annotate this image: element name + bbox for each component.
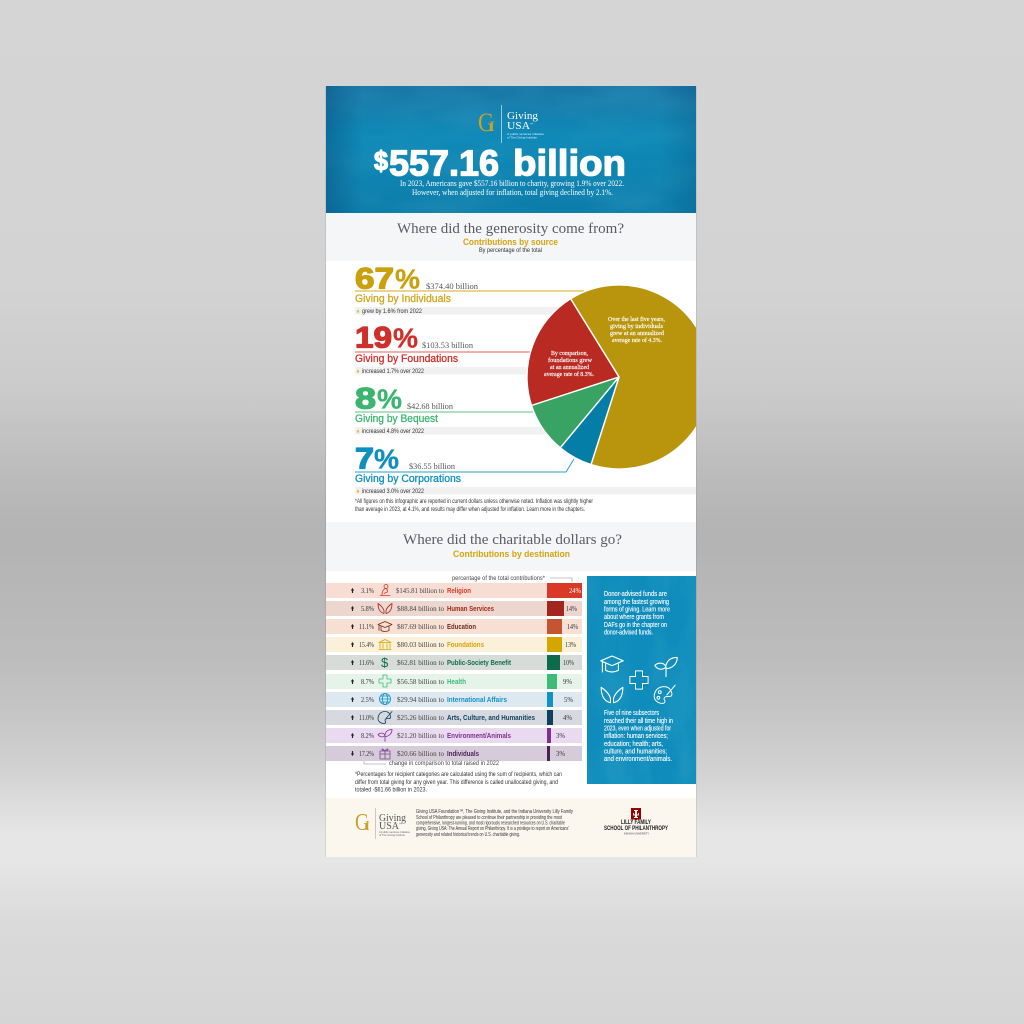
footnote: unallocated giving: *Percentages for recipient categories are calculated using the sum of recipients, which can — [355, 772, 562, 778]
row: environment/animals: $21.20 billion to — [397, 731, 444, 740]
pie callout: individuals — [608, 316, 665, 344]
row: public-society benefit: 11.6% — [359, 658, 374, 667]
row: human services: 5.8% — [361, 604, 374, 613]
row: foundations: $80.03 billion to — [397, 640, 444, 649]
footer logo: Giving USA: USA — [379, 821, 400, 832]
footer statement: generosity and related historical trends on U.S. charitable giving. — [416, 832, 520, 838]
row: arts, culture, and humanities: 4% — [563, 713, 572, 722]
panel text: record subsectors — [604, 710, 673, 763]
panel text: record subsectors: inflation: human services; — [604, 733, 668, 740]
row: religion: 24% — [569, 586, 581, 595]
row: environment/animals: Environment/Animals — [447, 733, 511, 740]
row: foundations: Foundations — [447, 642, 484, 649]
icon: plant leaves — [655, 657, 677, 677]
pie callout: foundations: By comparison, — [551, 350, 588, 357]
panel text: donor-advised funds: Donor-advised funds are — [604, 591, 667, 598]
row: individuals: 17.2% — [359, 749, 374, 758]
header banner — [326, 86, 696, 213]
source: individuals: grew by 1.6% from 2022 — [362, 309, 423, 315]
source: foundations — [355, 322, 530, 375]
source: corporations — [355, 442, 574, 495]
row: arts, culture, and humanities: Arts, Culture, and Humanities — [447, 715, 535, 722]
heading band: destinations: Where did the charitable dollars go? — [403, 532, 622, 548]
row: education: 11.1% — [359, 622, 374, 631]
row: international affairs: $29.94 billion to — [397, 695, 444, 704]
logo: Giving USA: G — [478, 108, 494, 137]
footer logo: Giving USA: Giving — [379, 813, 406, 824]
panel text: record subsectors: culture, and humanities; — [604, 748, 667, 756]
row: health: Health — [447, 679, 466, 686]
source: corporations: 7 — [355, 442, 374, 476]
row: health: 8.7% — [361, 677, 374, 686]
pie callout: individuals: average rate of 4.3%. — [612, 337, 662, 344]
row: health: $56.58 billion to — [397, 677, 444, 686]
source: corporations: $36.55 billion — [409, 461, 456, 471]
footer logo: Giving USA: A public services initiative — [379, 830, 410, 834]
row: arts, culture, and humanities: $25.26 billion to — [397, 713, 444, 722]
row: human services: Human Services — [447, 606, 494, 613]
row: religion: $145.81 billion to — [396, 586, 444, 595]
row: health: 9% — [563, 677, 572, 686]
heading band: sources: By percentage of the total — [479, 248, 542, 254]
headline total: billion — [513, 142, 626, 184]
row: individuals — [326, 746, 582, 761]
icon: artist palette — [654, 685, 675, 703]
row: individuals: $20.66 billion to — [397, 749, 444, 758]
pie callout: foundations — [544, 350, 594, 378]
header summary text: However, when adjusted for inflation, total giving declined by 2.1%. — [412, 188, 613, 197]
footer statement: School of Philanthropy are pleased to continue their partnership in providing the most — [416, 815, 562, 821]
footer logo: Lilly Family School of Philanthropy: SCHOOL OF PHILANTHROPY — [604, 826, 668, 832]
headline total — [374, 142, 626, 184]
heading band: destinations: Contributions by destination — [453, 549, 570, 559]
pie callout: individuals: giving by individuals — [610, 323, 663, 330]
pie callout: foundations: foundations grew — [548, 357, 592, 364]
row: international affairs: 5% — [564, 695, 573, 704]
panel text: record subsectors: Five of nine subsectors — [604, 710, 659, 717]
heading band: destinations — [326, 522, 696, 571]
footer statement — [416, 809, 573, 838]
row: religion: 3.1% — [361, 586, 374, 595]
source: bequest: increased 4.8% over 2022 — [362, 429, 425, 435]
poster page — [325, 86, 711, 857]
logo: Giving USA: of The Giving Institute — [507, 136, 537, 140]
row: arts, culture, and humanities — [326, 710, 582, 725]
source: foundations: $103.53 billion — [422, 340, 474, 350]
row: individuals: 3% — [556, 749, 565, 758]
row: education: 14% — [567, 622, 578, 631]
row: public-society benefit — [326, 655, 582, 670]
panel text: record subsectors: reached their all time high in — [604, 718, 673, 725]
footer statement: giving, Giving USA: The Annual Report on Philanthropy. It is a privilege to report on Americans' — [416, 826, 569, 832]
footer logo: Giving USA: ™ — [399, 822, 402, 826]
footnote: unallocated giving — [355, 772, 562, 794]
footnote: inflation: than average in 2023, at 4.1%, and results may differ when adjusted for inflation. Learn more in the chapters. — [355, 507, 585, 513]
panel: donor-advised funds and subsectors — [587, 576, 696, 784]
gray note bars — [355, 307, 696, 494]
row: human services: $88.84 billion to — [397, 604, 444, 613]
icon: open hands — [601, 687, 623, 703]
heading band: sources: Contributions by source — [463, 237, 558, 247]
panel text: donor-advised funds — [604, 591, 670, 636]
source: corporations: % — [374, 444, 399, 474]
header summary text: In 2023, Americans gave $557.16 billion to charity, growing 1.9% over 2022. — [400, 179, 624, 188]
logo: Giving USA: Giving — [507, 110, 539, 122]
pie callout: individuals: grew at an annualized — [610, 330, 665, 337]
source: foundations: increased 1.7% over 2022 — [362, 369, 425, 375]
source: bequest: % — [377, 384, 402, 414]
footer logo: Giving USA — [355, 808, 410, 839]
source: bequest: 8 — [355, 382, 376, 416]
icon: health cross — [630, 671, 648, 689]
row: public-society benefit: $62.81 billion to — [397, 658, 444, 667]
row: foundations: 15.4% — [359, 640, 374, 649]
panel text: donor-advised funds: forms of giving. Learn more — [604, 606, 670, 614]
row: individuals: Individuals — [447, 751, 479, 758]
row: international affairs — [326, 692, 582, 707]
row: international affairs: International Affairs — [447, 697, 507, 704]
footer logo: Giving USA: G — [355, 810, 369, 836]
source: corporations: Giving by Corporations — [355, 473, 461, 485]
row: environment/animals — [326, 728, 582, 743]
footnote: inflation — [355, 499, 593, 513]
header summary text — [400, 179, 624, 197]
row: public-society benefit: Public-Society Benefit — [447, 660, 512, 667]
row: environment/animals: 3% — [556, 731, 565, 740]
source: bequest: Giving by Bequest — [355, 413, 438, 425]
footer statement: comprehensive, longest-running, and most rigorously researched resources on U.S. charitable — [416, 820, 565, 826]
footer logo: Giving USA: of The Giving Institute — [379, 833, 405, 837]
panel text: donor-advised funds: about where grants from — [604, 614, 664, 621]
pie chart: contributions by source — [527, 285, 711, 469]
source: foundations: % — [393, 322, 418, 354]
footer statement: Giving USA Foundation™, The Giving Institute, and the Indiana University Lilly Family — [416, 809, 573, 815]
row: religion: Religion — [447, 588, 471, 595]
logo: Giving USA — [478, 105, 544, 143]
row: human services: 14% — [566, 604, 577, 613]
footer logo: Lilly Family School of Philanthropy: INDIANA UNIVERSITY — [624, 832, 649, 836]
panel text: donor-advised funds: DAFs go in the chapter on — [604, 622, 667, 629]
logo: Giving USA: I — [489, 119, 495, 135]
row: environment/animals: 8.2% — [361, 731, 374, 740]
panel text: donor-advised funds: donor-advised funds. — [604, 630, 653, 636]
row: health — [326, 674, 582, 689]
icon: graduation cap — [601, 656, 623, 672]
footer logo: Giving USA: I — [365, 819, 370, 834]
source: individuals: % — [395, 264, 420, 294]
headline total: $ — [374, 146, 388, 176]
source: corporations: increased 3.0% over 2022 — [362, 489, 425, 495]
row: international affairs: 2.5% — [361, 695, 374, 704]
row: education: Education — [447, 624, 476, 631]
source: individuals: 67 — [355, 262, 394, 296]
logo: Giving USA: A public services initiative — [507, 132, 544, 136]
footer band — [326, 798, 696, 857]
source: bequest: $42.68 billion — [407, 401, 454, 411]
source: individuals: Giving by Individuals — [355, 293, 451, 305]
row: religion — [326, 583, 582, 598]
footer logo: Lilly Family School of Philanthropy — [604, 808, 668, 836]
source: individuals: $374.40 billion — [426, 281, 479, 291]
legend: change in comparison: change in comparison to total raised in 2022 — [389, 761, 500, 767]
row: foundations: 13% — [565, 640, 576, 649]
source: individuals — [355, 262, 584, 315]
source: foundations: 19 — [355, 322, 392, 354]
panel text: record subsectors: and environment/animals. — [604, 756, 672, 763]
source: bequest — [355, 382, 533, 435]
row: public-society benefit: $ — [381, 655, 389, 670]
footnote: inflation: *All figures on this infographic are reported in current dollars unless otherwise noted. Inflation was slightly higher — [355, 499, 593, 505]
pie callout: foundations: at an annualized — [550, 364, 590, 371]
row: foundations — [326, 637, 582, 652]
heading band: sources: Where did the generosity come from? — [397, 221, 624, 237]
row: arts, culture, and humanities: 11.0% — [359, 713, 374, 722]
footer logo: Lilly Family School of Philanthropy: LILLY FAMILY — [621, 820, 651, 826]
heading band: sources — [326, 213, 696, 261]
headline total: 557.16 — [389, 142, 499, 184]
footnote: unallocated giving: totaled -$61.66 billion in 2023. — [355, 788, 427, 794]
footnote: unallocated giving: differ from total giving for any given year. This difference is called unallocated giving, and — [355, 780, 558, 786]
logo: Giving USA: ™ — [530, 122, 533, 126]
pie callout: individuals: Over the last five years, — [608, 316, 665, 323]
row: human services — [326, 601, 582, 616]
row: education: $87.69 billion to — [397, 622, 444, 631]
panel text: donor-advised funds: among the fastest growing — [604, 599, 669, 606]
legend: percentage of total: percentage of the total contributions* — [452, 576, 546, 582]
pie callout: foundations: average rate of 8.3%. — [544, 371, 594, 378]
row: public-society benefit: 10% — [563, 658, 574, 667]
logo: Giving USA: USA — [507, 120, 530, 132]
source: foundations: Giving by Foundations — [355, 353, 458, 365]
row: education — [326, 619, 582, 634]
panel text: record subsectors: education; health; arts, — [604, 741, 663, 748]
panel text: record subsectors: 2023, even when adjusted for — [604, 726, 671, 732]
